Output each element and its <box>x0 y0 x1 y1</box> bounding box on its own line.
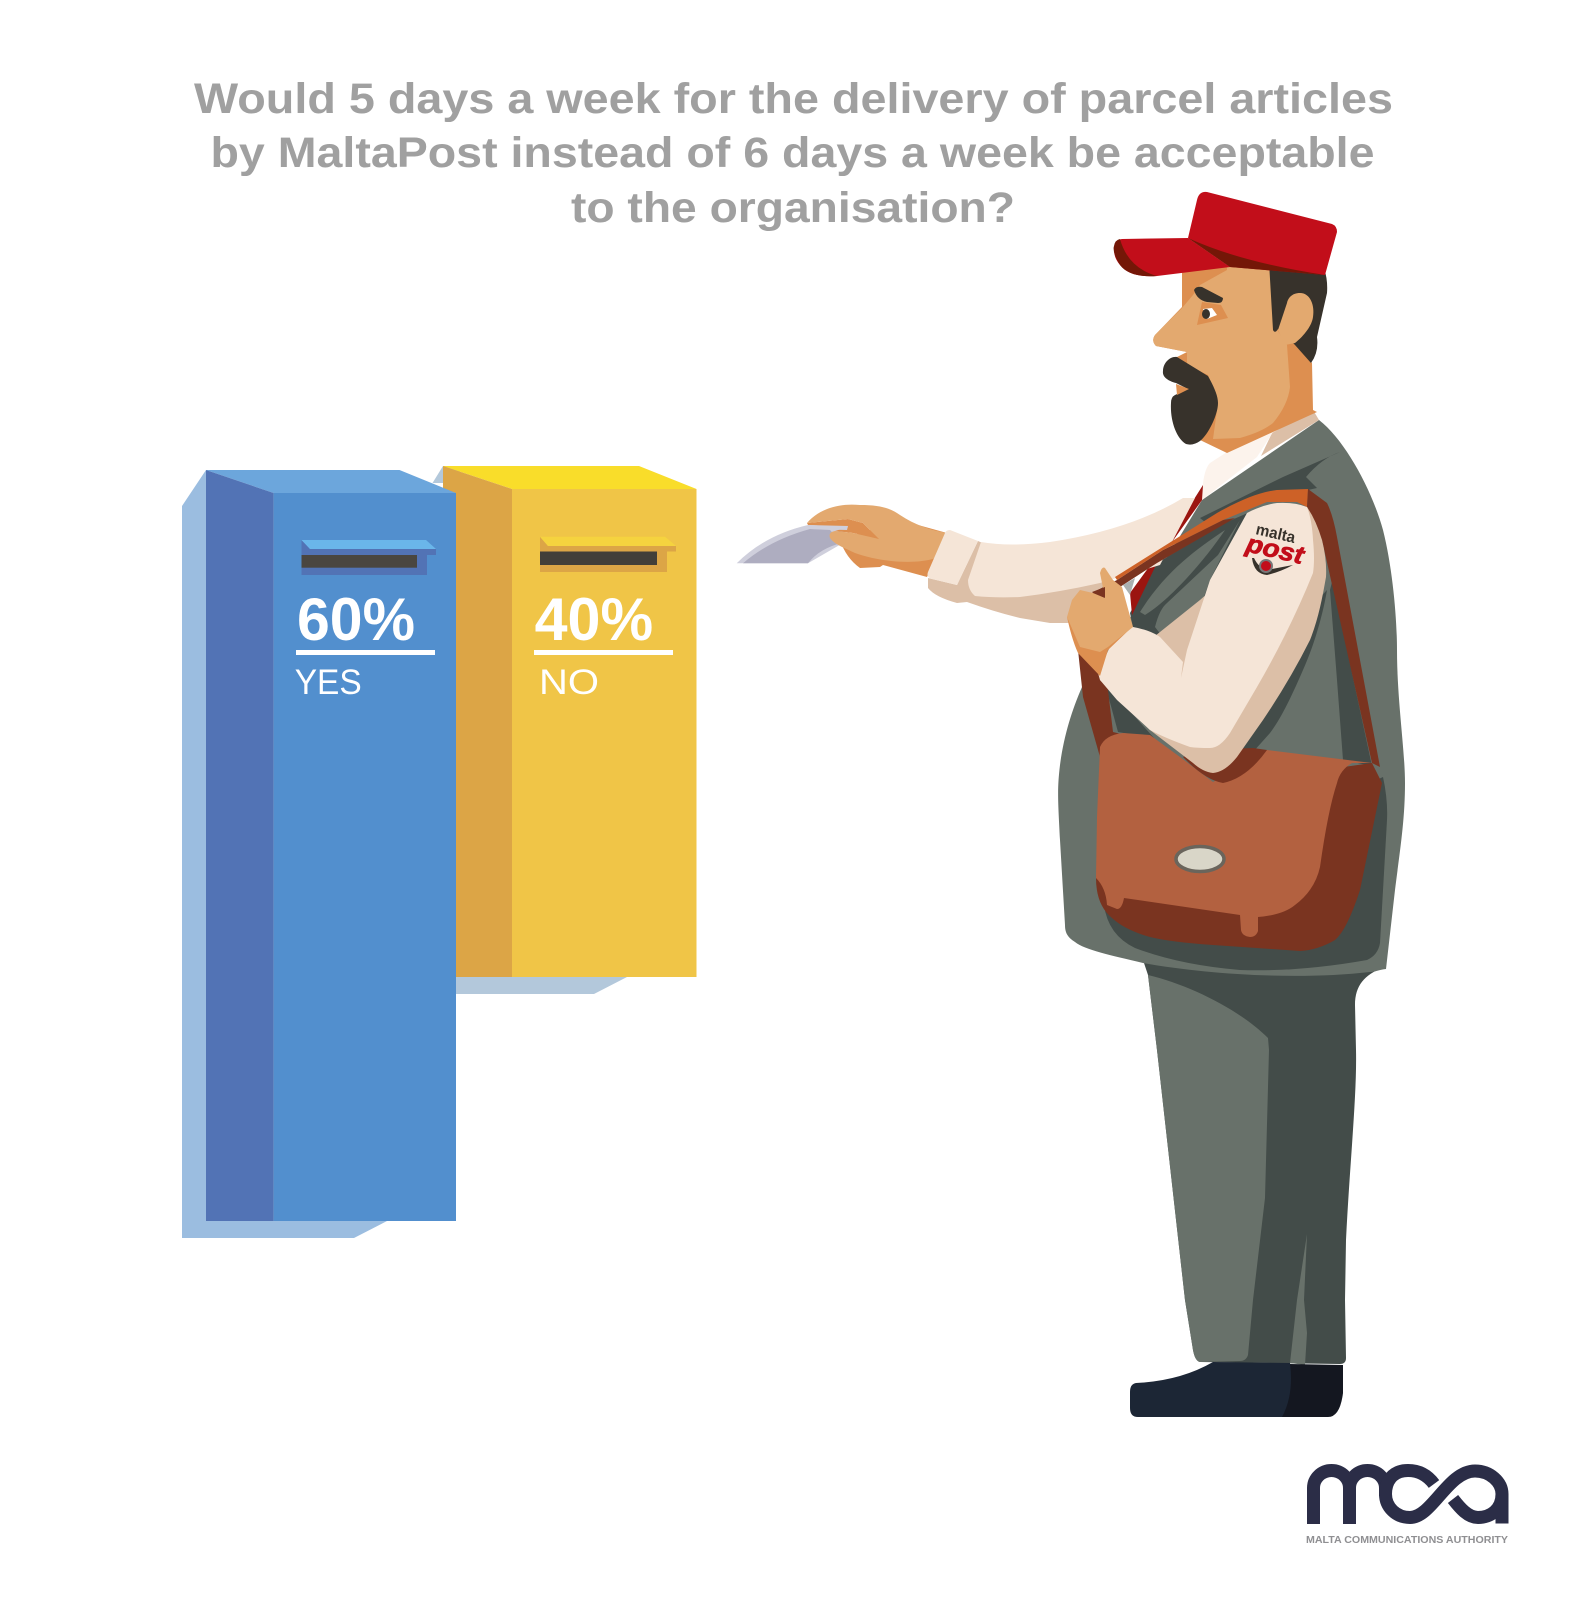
trousers <box>1143 960 1382 1365</box>
postman cap <box>1114 192 1337 276</box>
title <box>194 75 1393 232</box>
MCA logo <box>1306 1470 1508 1546</box>
eyebrow <box>1194 287 1223 303</box>
value: 40%: 40% <box>535 586 653 653</box>
letter <box>737 525 848 563</box>
logo wordmark: MALTA COMMUNICATIONS AUTHORITY <box>1306 1534 1508 1546</box>
gripping hand <box>1067 568 1135 676</box>
title: by MaltaPost instead of 6 days a week be acceptable <box>210 129 1375 177</box>
shirt cuff <box>928 530 978 585</box>
malta post sleeve badge <box>1243 521 1308 575</box>
title: to the organisation? <box>571 184 1015 232</box>
blue post box: YES 60% <box>182 470 456 1238</box>
bag clasp <box>1176 846 1224 872</box>
shirt collar <box>1202 410 1319 500</box>
satchel shoulder strap <box>1078 489 1380 767</box>
outstretched hand with letter <box>737 505 978 585</box>
bent sleeve <box>1098 503 1326 773</box>
label: NO: NO <box>539 663 599 702</box>
malta post sleeve badge: malta <box>1254 521 1297 547</box>
yellow post box: NO 40% <box>432 466 696 994</box>
waistcoat <box>1058 420 1405 976</box>
logo mark <box>1314 1470 1502 1524</box>
beard and moustache <box>1163 357 1218 445</box>
malta post sleeve badge: post <box>1243 529 1308 570</box>
necktie <box>1130 485 1203 615</box>
outstretched sleeve <box>928 498 1195 623</box>
messenger bag <box>1096 733 1382 951</box>
letter slot: blue box <box>302 540 436 575</box>
head <box>1153 262 1327 453</box>
shoe <box>1130 1362 1343 1417</box>
title: Would 5 days a week for the delivery of parcel articles <box>194 75 1393 123</box>
letter slot: yellow box <box>540 537 676 572</box>
label: YES: YES <box>295 663 362 702</box>
eye <box>1197 302 1228 325</box>
postman illustration <box>737 192 1405 1417</box>
value: 60%: 60% <box>297 586 415 653</box>
